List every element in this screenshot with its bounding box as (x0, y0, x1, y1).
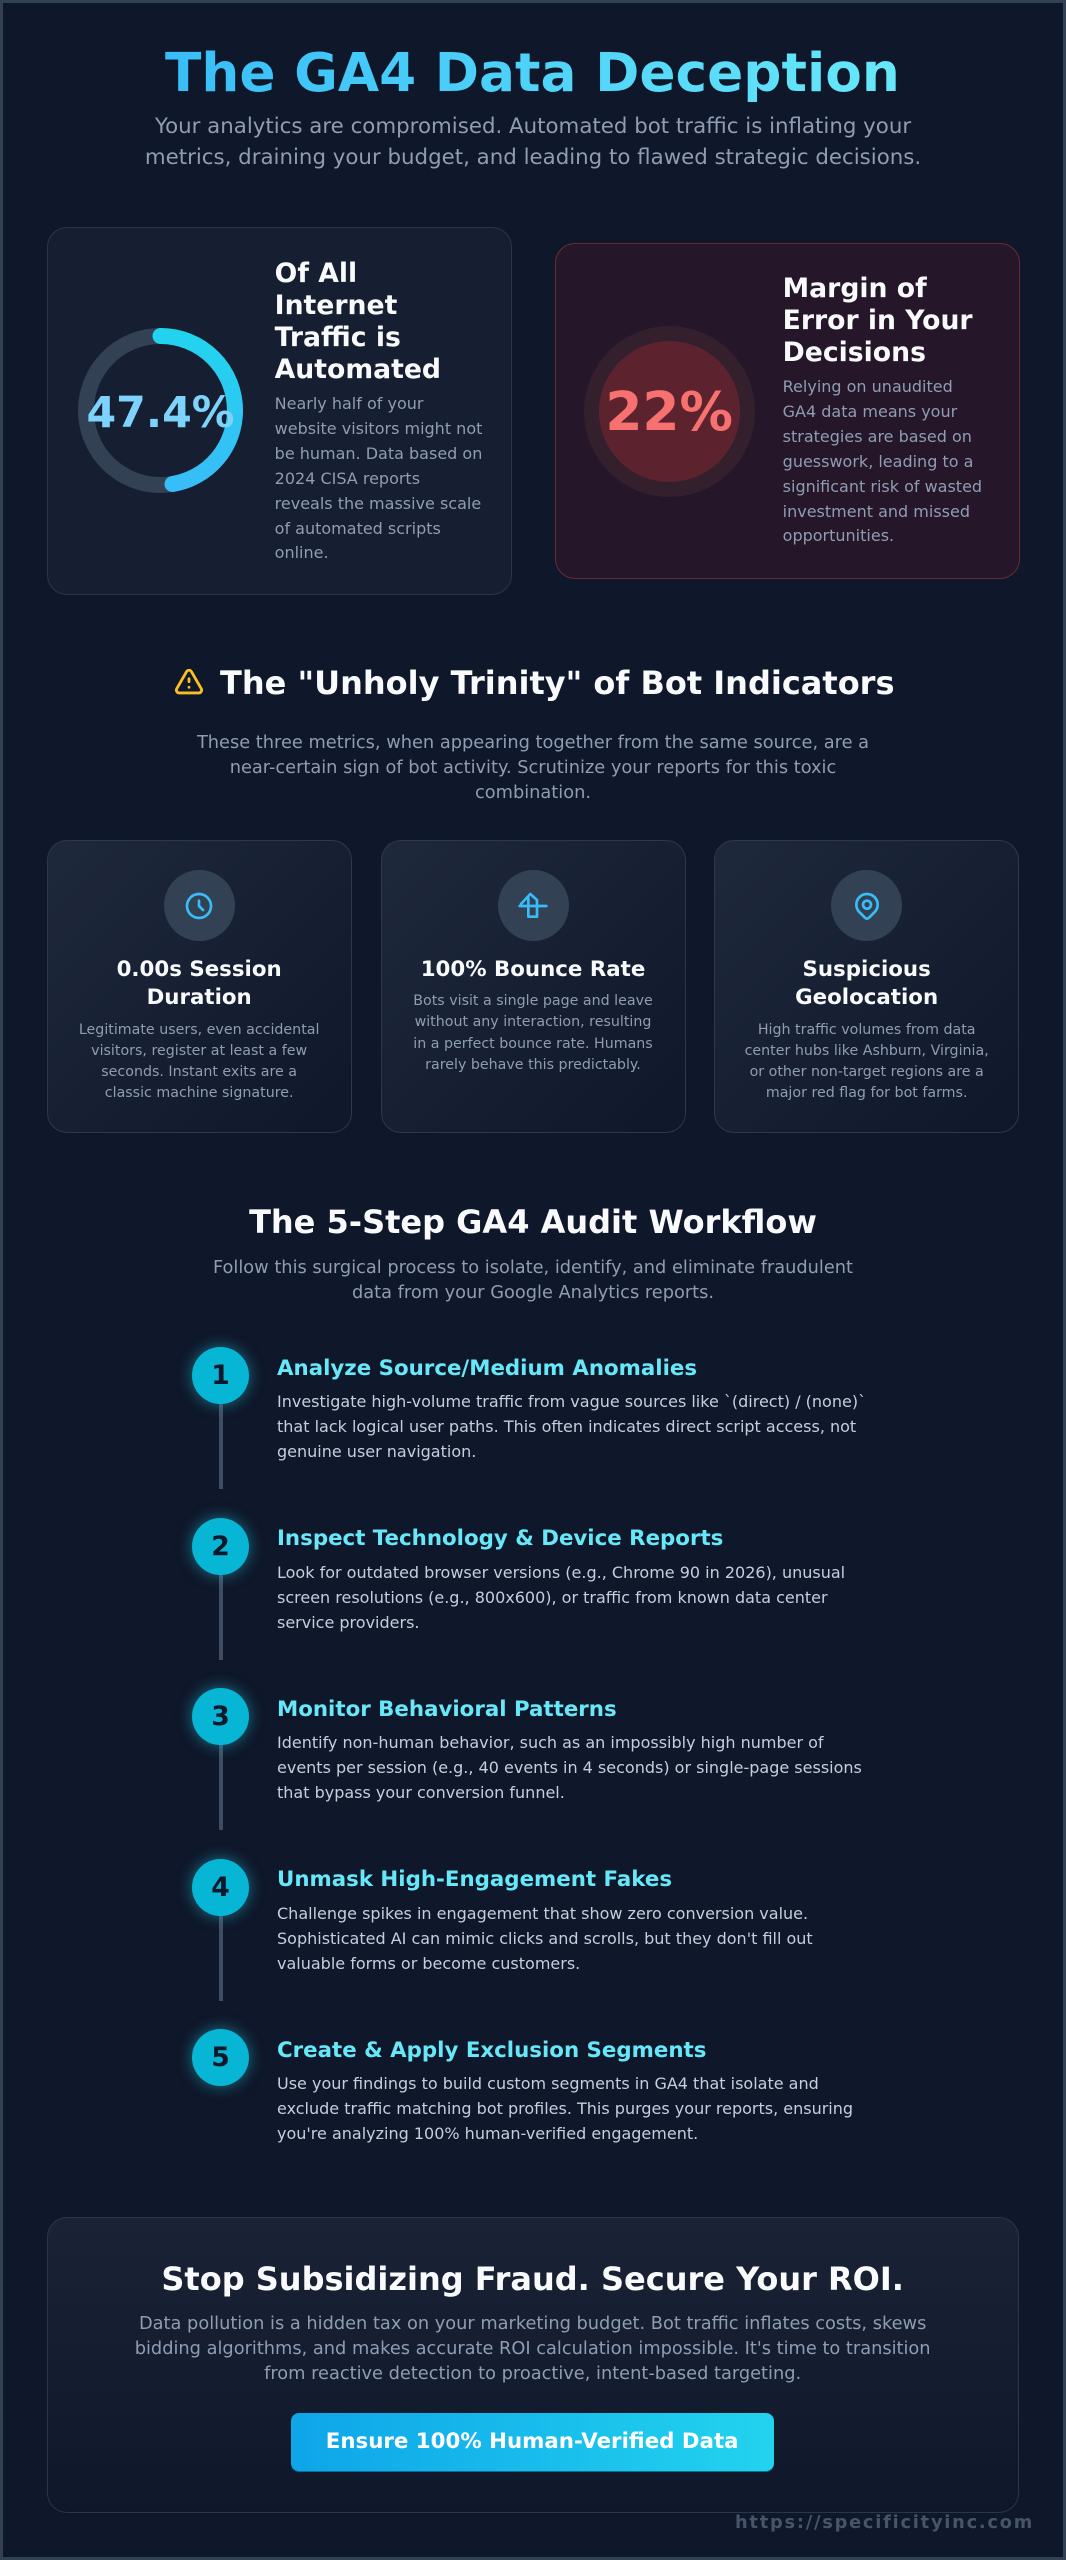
description: Nearly half of your (275, 394, 423, 413)
step 5 (183, 2020, 853, 2143)
step 4 (183, 1850, 813, 2001)
description: significant risk of wasted (783, 477, 982, 496)
intro text: trinity: near-certain sign of bot activity. Scrutinize your reports for this toxic (230, 757, 836, 778)
icon: bounce arrow (498, 870, 568, 941)
card title (795, 957, 938, 1010)
card text: visitors, register at least a few (91, 1043, 307, 1059)
donut chart: 47.4% (78, 328, 243, 493)
description: opportunities. (783, 526, 894, 545)
icon: warning triangle (174, 668, 204, 694)
card title (117, 957, 282, 1010)
step 2 (183, 1509, 845, 1660)
CTA button: Ensure 100% Human-Verified Data (326, 2429, 739, 2454)
description: investment and missed (783, 502, 970, 521)
step text: exclude traffic matching bot profiles. This purges your reports, ensuring (277, 2099, 853, 2118)
subtitle (145, 114, 921, 170)
step title: Unmask High-Engagement Fakes (277, 1867, 672, 1892)
CTA text (135, 2312, 931, 2384)
heading: Traffic is (275, 322, 401, 353)
card text: rarely behave this predictably. (425, 1057, 641, 1073)
number badge: 1 (211, 1360, 230, 1391)
step text: valuable forms or become customers. (277, 1954, 580, 1972)
description: GA4 data means your (783, 402, 957, 421)
CTA text: Data pollution is a hidden tax on your marketing budget. Bot traffic inflates costs, skews (139, 2312, 926, 2334)
connector (218, 1574, 222, 1660)
description: Relying on unaudited (783, 377, 953, 396)
description: 2024 CISA reports (275, 469, 420, 488)
description: online. (275, 543, 329, 562)
card text: Legitimate users, even accidental (79, 1022, 319, 1038)
subtitle: Your analytics are compromised. Automated bot traffic is inflating your (155, 114, 911, 139)
heading: Error in Your (783, 305, 973, 336)
title: The GA4 Data Deception (165, 41, 900, 104)
heading text: The "Unholy Trinity" of Bot Indicators (220, 664, 894, 702)
icon: clock (164, 870, 235, 941)
step text (277, 1733, 862, 1802)
CTA text: from reactive detection to proactive, intent-based targeting. (264, 2362, 801, 2384)
number badge: 5 (211, 2042, 230, 2073)
description: be human. Data based on (275, 444, 482, 463)
step text (277, 1392, 866, 1461)
red circle stat (584, 326, 755, 497)
panel: margin of error stat (555, 243, 1020, 579)
card text: High traffic volumes from data (758, 1022, 975, 1038)
heading: Margin of (783, 273, 927, 304)
number badge (192, 1518, 249, 1574)
CTA button (291, 2413, 774, 2471)
step title: Create & Apply Exclusion Segments (277, 2038, 706, 2062)
icon: map pin (831, 870, 902, 941)
panel: geolocation (714, 840, 1019, 1133)
description (275, 394, 482, 562)
step text: that lack logical user paths. This often indicates direct script access, not (277, 1417, 856, 1436)
intro text: workflow: Follow this surgical process to isolate, identify, and eliminate fraudulent (213, 1256, 853, 1278)
intro text: trinity: These three metrics, when appearing together from the same source, are a (197, 732, 869, 753)
card text (79, 1022, 319, 1101)
heading: Decisions (783, 337, 926, 368)
number badge: 3 (211, 1701, 230, 1732)
card title: 0.00s Session (117, 957, 282, 982)
card title: Suspicious (802, 957, 931, 982)
connector (218, 1744, 222, 1830)
panel: session duration (47, 840, 352, 1133)
panel: automated traffic stat (47, 227, 512, 595)
panel: call to action (47, 2217, 1019, 2513)
step 1 (183, 1338, 866, 1489)
description: of automated scripts (275, 519, 441, 538)
step text: Look for outdated browser versions (e.g., Chrome 90 in 2026), unusual (277, 1562, 845, 1582)
heading: Automated (275, 354, 441, 385)
step text: genuine user navigation. (277, 1442, 476, 1461)
step title: Analyze Source/Medium Anomalies (277, 1356, 697, 1380)
number badge: 2 (211, 1530, 230, 1562)
step 3 (183, 1679, 862, 1830)
heading: Of All (275, 258, 357, 289)
step text: events per session (e.g., 40 events in 4 seconds) or single-page sessions (277, 1758, 862, 1777)
description (783, 377, 982, 545)
heading: Unholy Trinity (174, 664, 894, 702)
donut chart: 47.4%: 47.4% (86, 388, 234, 438)
card text (413, 993, 653, 1073)
card title: 100% Bounce Rate (421, 957, 645, 982)
step text (277, 2074, 853, 2143)
subtitle: metrics, draining your budget, and leading to flawed strategic decisions. (145, 144, 921, 170)
step title: Monitor Behavioral Patterns (277, 1696, 617, 1722)
intro text: workflow (213, 1256, 853, 1302)
step text: Identify non-human behavior, such as an impossibly high number of (277, 1733, 824, 1752)
CTA text: bidding algorithms, and makes accurate ROI calculation impossible. It's time to transition (135, 2338, 931, 2358)
step text: Challenge spikes in engagement that show zero conversion value. (277, 1904, 808, 1922)
number badge (192, 1347, 249, 1404)
step title: Inspect Technology & Device Reports (277, 1526, 723, 1551)
card text: center hubs like Ashburn, Virginia, (745, 1043, 989, 1059)
intro text: trinity: combination. (475, 782, 591, 803)
card title: Duration (147, 985, 252, 1010)
card text: in a perfect bounce rate. Humans (413, 1036, 653, 1052)
heading: workflow: The 5-Step GA4 Audit Workflow (249, 1203, 817, 1241)
heading: Internet (275, 290, 397, 321)
panel: bounce rate (380, 840, 686, 1133)
connector (218, 1403, 222, 1489)
number badge (192, 1688, 249, 1745)
description: strategies are based on (783, 427, 972, 446)
card text: seconds. Instant exits are a (101, 1064, 297, 1080)
step text: screen resolutions (e.g., 800x600), or traffic from known data center (277, 1588, 828, 1606)
heading (783, 273, 973, 368)
step text: Sophisticated AI can mimic clicks and scrolls, but they don't fill out (277, 1928, 813, 1948)
step text: Investigate high-volume traffic from vague sources like `(direct) / (none)` (277, 1392, 866, 1411)
card text: Bots visit a single page and leave (413, 993, 653, 1009)
card text: without any interaction, resulting (415, 1014, 651, 1030)
description: website visitors might not (275, 419, 482, 438)
number badge: 4 (211, 1872, 230, 1902)
connector (218, 1914, 222, 2000)
heading (274, 258, 441, 385)
description: reveals the massive scale (275, 494, 481, 513)
step text (277, 1904, 813, 1972)
card text: major red flag for bot farms. (766, 1085, 967, 1101)
number badge (192, 1858, 249, 1916)
card text: classic machine signature. (105, 1085, 294, 1101)
step text: that bypass your conversion funnel. (277, 1783, 565, 1802)
red circle stat: 22% (605, 380, 733, 443)
step text: Use your findings to build custom segments in GA4 that isolate and (277, 2074, 819, 2093)
step text: service providers. (277, 1612, 419, 1632)
card text (745, 1022, 989, 1101)
step text (277, 1562, 845, 1632)
intro text: workflow: data from your Google Analytics reports. (352, 1282, 714, 1302)
source URL: https://specificityinc.com (735, 2512, 1034, 2533)
card title: Geolocation (795, 985, 938, 1010)
number badge (192, 2029, 249, 2086)
intro text: trinity (196, 732, 869, 803)
card text: or other non-target regions are a (750, 1064, 984, 1080)
CTA heading: Stop Subsidizing Fraud. Secure Your ROI. (161, 2260, 904, 2298)
step text: you're analyzing 100% human-verified engagement. (277, 2124, 698, 2143)
description: guesswork, leading to a (783, 452, 973, 471)
